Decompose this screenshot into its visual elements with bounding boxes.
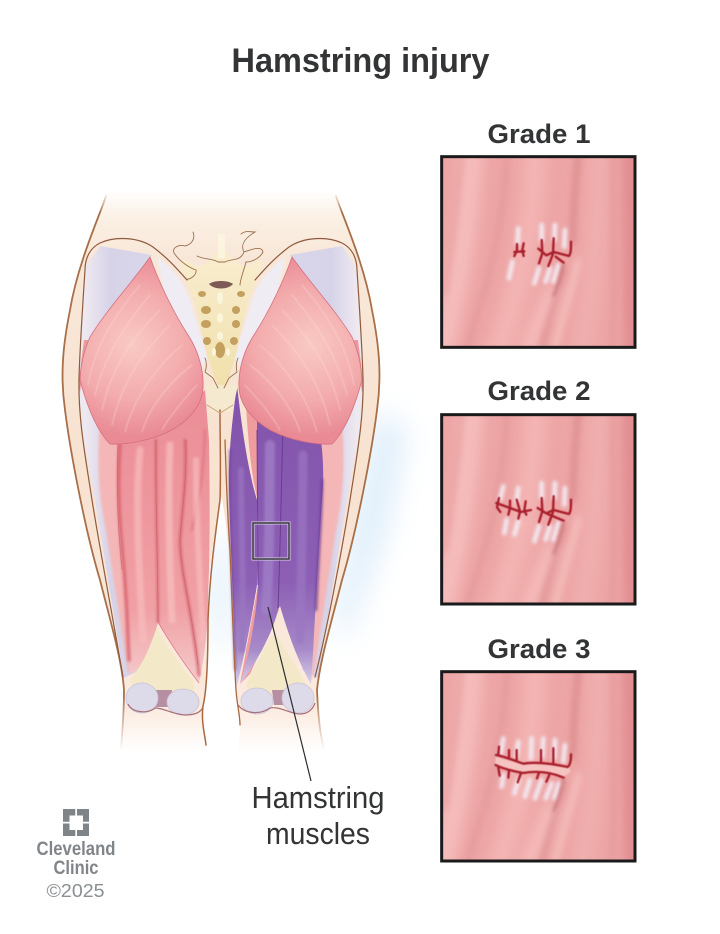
right hamstrings, purple [229,385,323,688]
blue glow behind legs [212,410,405,650]
logo text: Cleveland [36,839,116,860]
pale fascia over sacral edges, left [157,257,207,368]
left hamstrings, pink [117,390,210,683]
skin silhouette [63,190,379,752]
Cleveland Clinic logo: Clinic [54,858,99,879]
fibres around grade 2 tear [500,483,565,541]
fibres around grade 3 tear [501,738,565,798]
heading: grade 2: Grade 2 [488,376,590,406]
panel: grade 1 tear [442,153,635,350]
detail marker square [253,523,289,559]
lateral pink band, right [311,425,344,680]
heading: grade 3: Grade 3 [488,634,590,664]
body contour lines [63,196,379,748]
sacrum and pelvis bone [174,232,264,412]
fibres around grade 1 tear [509,225,565,283]
panel: grade 2 tear [442,411,635,608]
right femur and popliteal [238,636,315,714]
right side pink underlay [240,405,279,684]
label: hamstring muscles: Hamstring [252,780,384,815]
title: Hamstring injury [232,42,490,80]
icon: clinic cross mark [63,809,89,836]
illustration: posterior hips and thighs [63,190,405,752]
iliotibial pink strips [79,340,363,392]
lateral fascia, right [290,246,362,678]
left gluteus maximus [80,257,203,444]
grade 3 tear marks [496,747,571,782]
grade 3 rupture gap [495,757,570,777]
leader line to hamstring muscles [268,607,311,781]
label: hamstring muscles: muscles [266,816,370,851]
panel: grade 3 tear [442,668,635,865]
lateral pink band, left [98,425,130,675]
right gluteus maximus [239,257,362,444]
label: hamstring muscles [252,780,384,851]
left femur and popliteal [126,627,203,715]
heading: grade 1: Grade 1 [488,119,590,149]
Cleveland Clinic logo [36,809,116,901]
pale fascia over sacral edges, right [235,257,285,368]
copyright: ©2025 [46,881,104,901]
lateral fascia, left [80,246,152,678]
grade 2 tear marks [496,496,571,525]
grade 1 tear marks [514,238,571,266]
